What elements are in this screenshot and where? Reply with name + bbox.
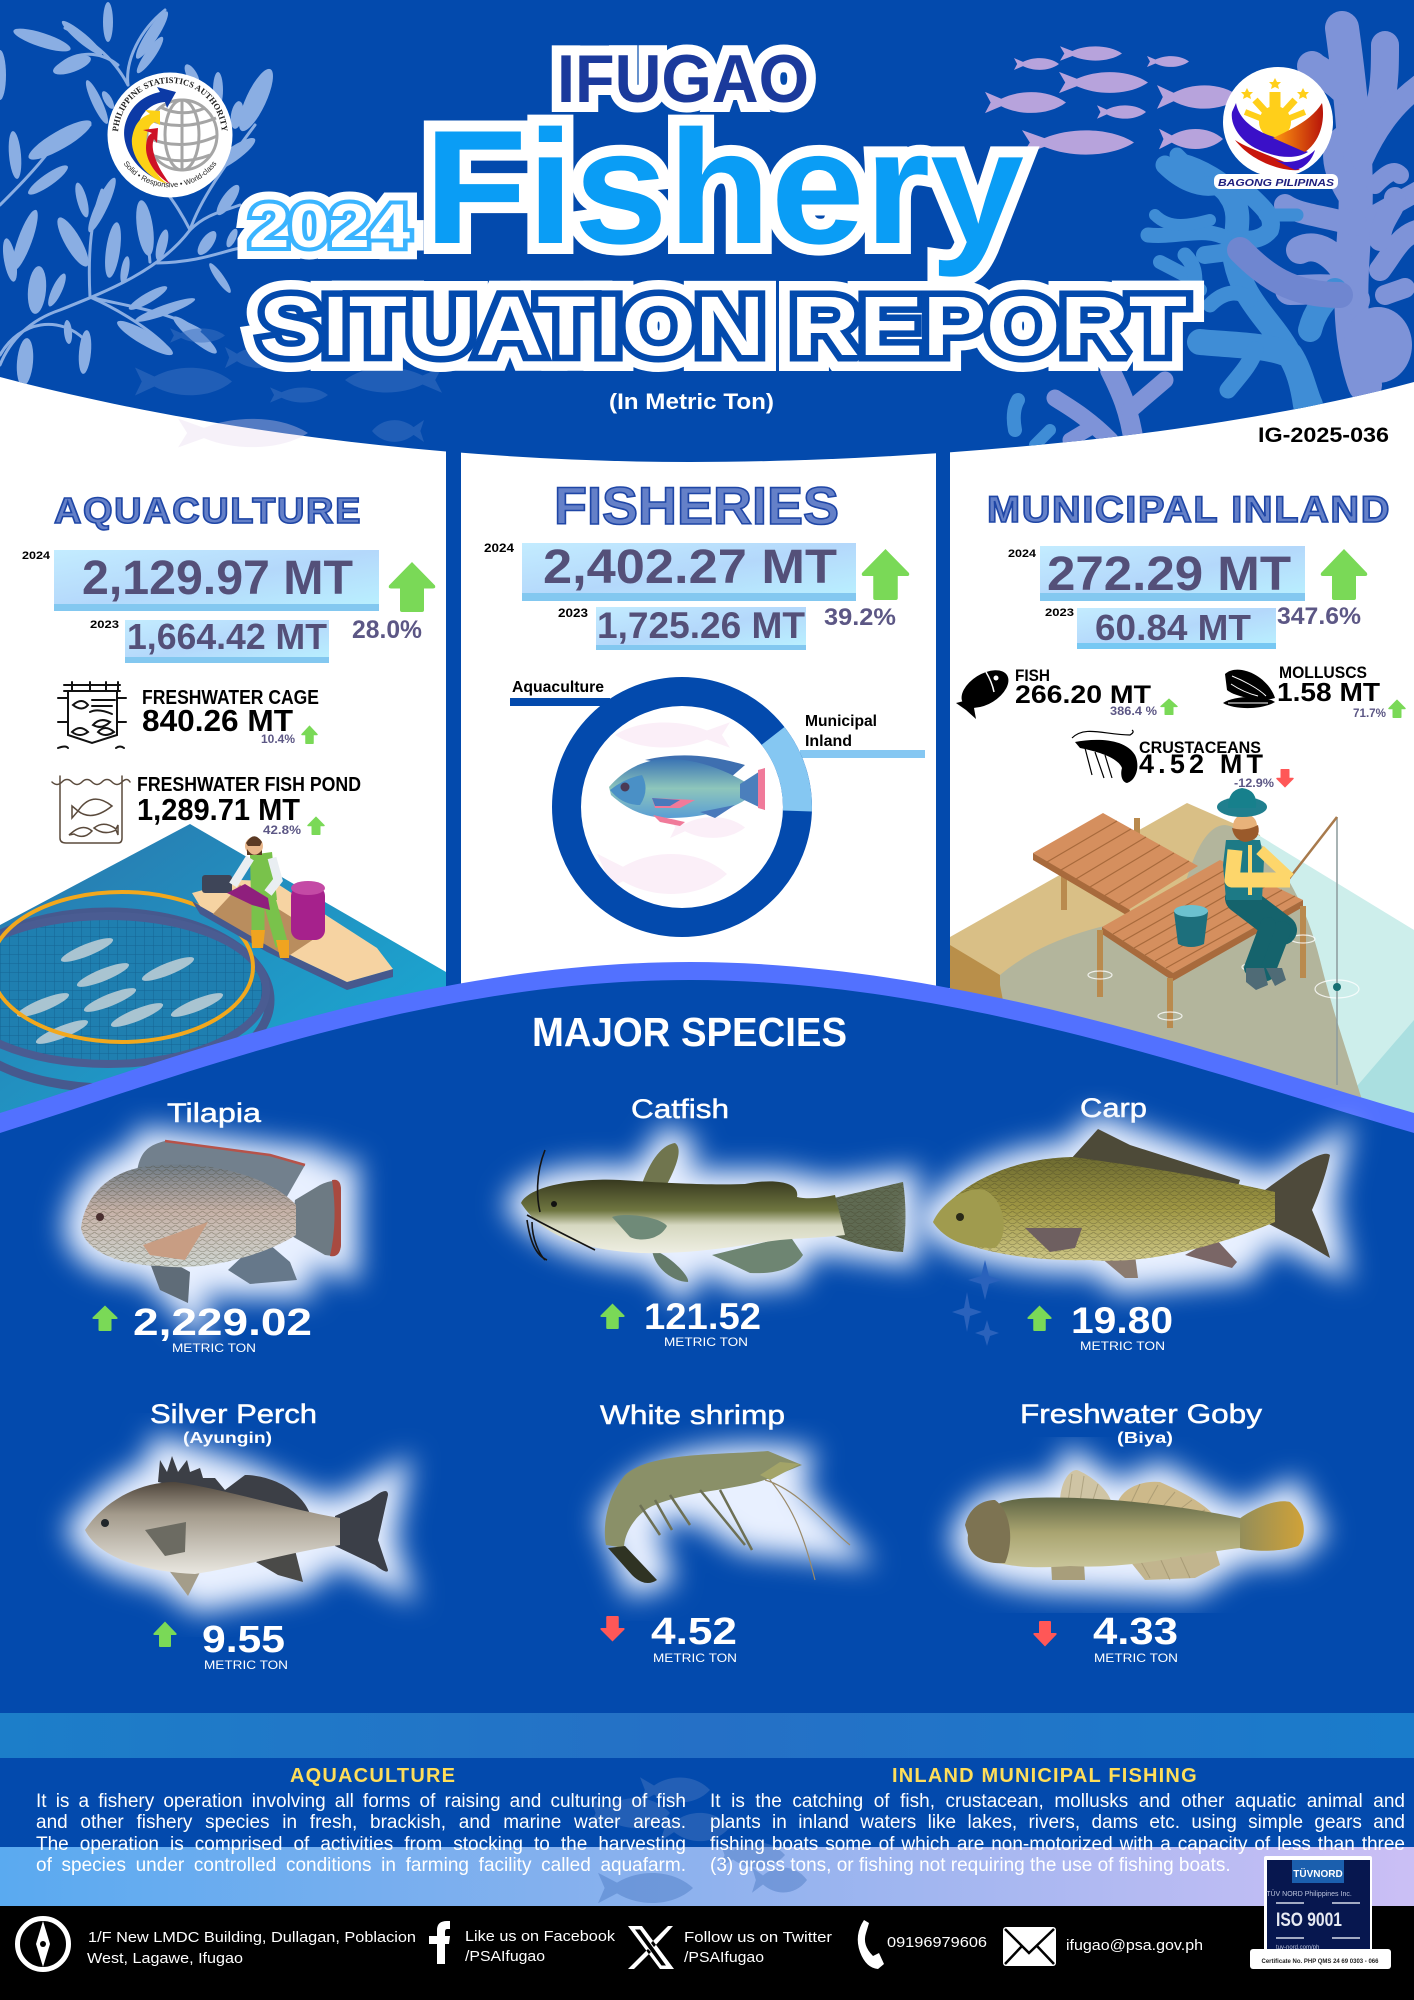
- icon: up arrow: [389, 562, 435, 612]
- ISO 9001 badge: TÜV NORD Philippines Inc.: [1266, 1890, 1352, 1898]
- species: freshwater goby: [965, 1399, 1306, 1665]
- 2023 value bar: 2023: [1045, 607, 1074, 619]
- crustaceans stat: 4.52 MT: [1139, 749, 1264, 779]
- fish stat: FISH: [1015, 666, 1050, 685]
- crustaceans stat: CRUSTACEANS: [1139, 738, 1261, 757]
- text: inland municipal fishing definition: (3) gross tons, or fishing not requiring the use of fishing boats.: [710, 1855, 1231, 1876]
- species: tilapia: [81, 1098, 341, 1355]
- footer: facebook: [429, 1921, 616, 1965]
- icon: up arrow: [1321, 549, 1367, 600]
- title: situation report: SITUATION REPORT: [259, 279, 1187, 373]
- footer: address: [18, 1918, 416, 1970]
- fish stat: 266.20 MT: [1015, 681, 1151, 709]
- footer bar: [0, 1906, 1414, 2000]
- freshwater fish pond stat: [137, 774, 361, 837]
- icon: up arrow: [153, 1622, 177, 1647]
- logo: philippine statistics authority: PHILIPPINE STATISTICS AUTHORITY: [112, 77, 228, 132]
- value: 9.55: [202, 1619, 285, 1661]
- logo: philippine statistics authority: [108, 72, 232, 198]
- icon: x: [628, 1926, 674, 1969]
- footer: phone: 09196979606: [887, 1934, 987, 1951]
- freshwater fish pond stat: 42.8%: [263, 823, 301, 837]
- icon: envelope: [1003, 1927, 1056, 1966]
- 2023 value bar: 1,664.42 MT: [127, 616, 327, 657]
- icon: phone: [858, 1920, 884, 1969]
- value: 19.80: [1071, 1300, 1173, 1341]
- text: inland municipal fishing definition: plants in inland waters like lakes, rivers, dams etc. using simple gears and: [710, 1812, 1405, 1833]
- heading: inland municipal fishing definition: INLAND MUNICIPAL FISHING: [892, 1765, 1198, 1787]
- text: aquaculture definition: The operation is comprised of activities from stocking to the harvesting: [36, 1834, 686, 1855]
- freshwater cage stat: [142, 687, 319, 746]
- heading: fisheries: FISHERIES: [554, 477, 839, 536]
- fish stat: [1015, 666, 1178, 718]
- 2024 value bar: 2,402.27 MT: [543, 541, 837, 594]
- decoration: school of fish: [985, 46, 1240, 155]
- fish stat: 386.4 %: [1110, 706, 1157, 718]
- unit: METRIC TON: [664, 1335, 748, 1349]
- value: 2,229.02: [133, 1302, 312, 1344]
- label: Catfish: [631, 1094, 729, 1124]
- footer: email: [1003, 1927, 1203, 1966]
- molluscs stat: 1.58 MT: [1277, 677, 1380, 707]
- text: inland municipal fishing definition: It is the catching of fish, crustacean, mollusks and other aquatic animal and: [710, 1791, 1405, 1812]
- freshwater cage stat: FRESHWATER CAGE: [142, 687, 319, 709]
- ISO 9001 badge: Certificate No. PHP QMS 24 69 0303 - 066: [1262, 1959, 1379, 1965]
- icon: up arrow: [92, 1306, 118, 1331]
- molluscs stat: 71.7%: [1353, 708, 1386, 720]
- change 28.0%: 28.0%: [352, 616, 422, 644]
- fish image: [81, 1141, 341, 1303]
- 2023 value bar: 60.84 MT: [1095, 607, 1251, 648]
- title: situation report: SITUATION REPORT: [259, 279, 1187, 373]
- unit: METRIC TON: [653, 1651, 737, 1665]
- donut chart: [510, 679, 925, 922]
- crustaceans stat: -12.9%: [1234, 776, 1274, 790]
- decoration: sparkles: [952, 1260, 1002, 1346]
- panel: municipal inland: [950, 489, 1414, 1140]
- title: 2024: 2024: [249, 192, 411, 261]
- 2024 value bar: 2,129.97 MT: [82, 552, 353, 605]
- crustaceans stat: [1139, 738, 1294, 790]
- unit: METRIC TON: [1094, 1651, 1178, 1665]
- title: ifugao: IFUGAO: [557, 41, 809, 117]
- change 347.6%: 347.6%: [1277, 603, 1361, 630]
- shrimp image: [605, 1451, 850, 1583]
- heading: major species: MAJOR SPECIES: [532, 1009, 847, 1055]
- subtitle: in metric ton: (In Metric Ton): [609, 389, 774, 414]
- illustration: fisherman on dock: [950, 788, 1414, 1140]
- fish image: [521, 1143, 906, 1282]
- footer: phone: [858, 1920, 987, 1969]
- 2023 value bar: 2023: [90, 619, 119, 631]
- footer: address: West, Lagawe, Ifugao: [87, 1950, 243, 1967]
- footer: facebook: /PSAIfugao: [465, 1948, 545, 1965]
- label: municipal inland: Inland: [805, 733, 852, 750]
- 2023 value bar: 1,725.26 MT: [597, 605, 805, 646]
- value: 121.52: [644, 1296, 761, 1337]
- 2024 value bar: 272.29 MT: [1047, 548, 1291, 601]
- footer: twitter: [628, 1926, 832, 1969]
- logo: bagong pilipinas: [1214, 67, 1338, 189]
- unit: METRIC TON: [204, 1658, 288, 1672]
- footer: email: ifugao@psa.gov.ph: [1066, 1937, 1203, 1954]
- label: Silver Perch: [150, 1399, 317, 1429]
- decoration: coral right: [1014, 28, 1414, 450]
- 2023 value bar: [1045, 607, 1276, 649]
- logo: philippine statistics authority: Solid • Responsive • World-class: [124, 161, 216, 188]
- freshwater fish pond stat: FRESHWATER FISH POND: [137, 774, 361, 796]
- species: silver perch: [85, 1399, 388, 1672]
- species: carp: [933, 1093, 1330, 1353]
- 2024 value bar: [484, 541, 856, 601]
- footer: facebook: Like us on Facebook: [465, 1928, 616, 1945]
- footer: twitter: /PSAIfugao: [684, 1949, 764, 1966]
- 2024 value bar: 2024: [1008, 548, 1037, 560]
- ISO 9001 badge: tuv-nord.com/ph: [1276, 1945, 1319, 1951]
- icon: tilapia illustration: [609, 755, 765, 826]
- species: white shrimp: [600, 1400, 850, 1665]
- footer: twitter: Follow us on Twitter: [684, 1929, 832, 1946]
- text: aquaculture definition: It is a fishery operation involving all forms of raising and culturing of fish: [36, 1791, 686, 1812]
- local name: (Biya): [1117, 1430, 1173, 1447]
- label: Freshwater Goby: [1020, 1399, 1263, 1429]
- icon: up arrow: [862, 549, 909, 600]
- panel: aquaculture: [0, 490, 446, 1140]
- ISO 9001 badge: ISO 9001: [1276, 1910, 1342, 1931]
- icon: freshwater cage: [58, 682, 126, 748]
- ISO 9001 badge: [1250, 1856, 1391, 1969]
- icon: down arrow: [1033, 1621, 1057, 1646]
- footer: address: 1/F New LMDC Building, Dullagan, Poblacion: [88, 1929, 416, 1946]
- species: catfish: [521, 1094, 906, 1349]
- icon: facebook: [429, 1921, 450, 1964]
- text: aquaculture definition: and other fishery species in fresh, brackish, and marine water areas.: [36, 1812, 686, 1833]
- major species band: [0, 962, 1414, 1720]
- fish image: [933, 1129, 1330, 1278]
- pastel gradient band: [0, 1847, 1414, 1906]
- heading: aquaculture definition: AQUACULTURE: [290, 1765, 456, 1787]
- panel: fisheries: [484, 477, 925, 922]
- 2024 value bar: 2024: [484, 543, 515, 555]
- icon: down arrow: [600, 1616, 625, 1642]
- decoration: faint fish low in header: [135, 328, 442, 447]
- value: 4.52: [651, 1611, 737, 1653]
- header band: [0, 0, 1414, 462]
- unit: METRIC TON: [172, 1341, 256, 1355]
- heading: aquaculture: AQUACULTURE: [54, 490, 362, 531]
- value: 4.33: [1093, 1611, 1178, 1653]
- local name: (Ayungin): [183, 1430, 272, 1447]
- title: fishery: Fishery: [424, 97, 1024, 278]
- logo: bagong pilipinas: BAGONG PILIPINAS: [1218, 177, 1334, 189]
- icon: up arrow: [600, 1304, 625, 1329]
- 2024 value bar: [22, 550, 379, 611]
- text: aquaculture definition: [36, 1791, 686, 1876]
- freshwater cage stat: 10.4%: [261, 732, 295, 746]
- heading: municipal inland: MUNICIPAL INLAND: [987, 489, 1391, 530]
- text: inland municipal fishing definition: [710, 1791, 1405, 1876]
- definitions background: [0, 1758, 1414, 1847]
- 2023 value bar: 2023: [558, 608, 588, 620]
- icon: fish: [955, 663, 1015, 719]
- unit: METRIC TON: [1080, 1339, 1165, 1353]
- label: Carp: [1080, 1093, 1147, 1123]
- water strip: [0, 1713, 1414, 1758]
- fish image: [85, 1455, 388, 1596]
- text: inland municipal fishing definition: fishing boats some of which are non-motorized with a capacity of less than three: [710, 1834, 1405, 1855]
- freshwater cage stat: 840.26 MT: [142, 703, 293, 738]
- icon: mollusc: [1223, 670, 1275, 708]
- ISO 9001 badge: TÜVNORD: [1293, 1867, 1343, 1880]
- decoration: seaweed left: [0, 2, 279, 387]
- decoration: faint fish behind definitions: [590, 1777, 807, 1903]
- illustration: fish cage and boat: [0, 824, 446, 1140]
- change 39.2%: 39.2%: [824, 604, 896, 631]
- document code: IG-2025-036: [1258, 424, 1389, 447]
- label: municipal inland: Municipal: [805, 713, 877, 730]
- fish image: [965, 1470, 1306, 1580]
- icon: compass: [18, 1918, 68, 1970]
- icon: shrimp: [1072, 730, 1137, 783]
- label: Tilapia: [167, 1098, 262, 1128]
- title: 2024: 2024: [249, 192, 411, 261]
- label: aquaculture: Aquaculture: [512, 679, 604, 696]
- molluscs stat: [1277, 663, 1406, 720]
- icon: freshwater fish pond: [52, 776, 130, 843]
- freshwater fish pond stat: 1,289.71 MT: [137, 792, 300, 827]
- text: aquaculture definition: of species under controlled conditions in farming facility called aquafarm.: [36, 1855, 686, 1876]
- divider bars between panels: [446, 448, 950, 988]
- icon: up arrow: [1027, 1306, 1052, 1331]
- label: White shrimp: [600, 1400, 785, 1430]
- molluscs stat: MOLLUSCS: [1279, 663, 1367, 682]
- 2024 value bar: 2024: [22, 550, 51, 562]
